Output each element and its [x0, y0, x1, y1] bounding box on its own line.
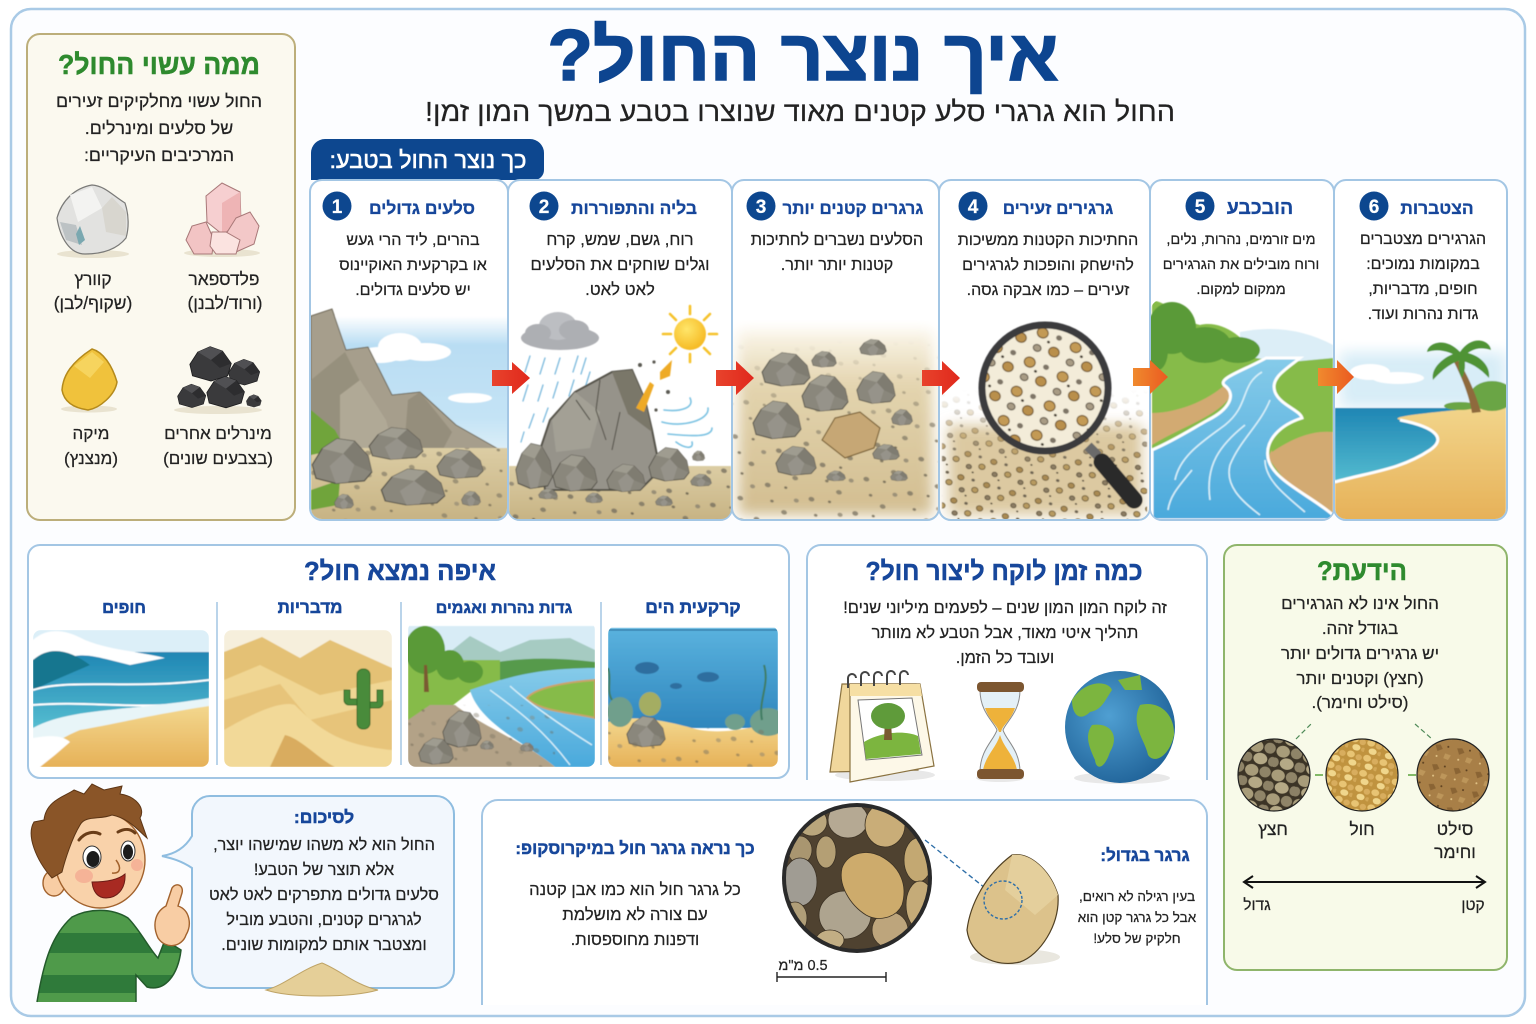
- text 5: ממקום למקום.: [1196, 281, 1286, 298]
- step 5: transport: [1148, 180, 1334, 520]
- illustration: eroding rock with rain, sun and wind: [509, 306, 731, 520]
- text: did you know: (חצץ) וקטנים יותר: [1296, 669, 1424, 688]
- heading 6: הצטברות: [1400, 198, 1474, 218]
- sample: silt and clay: וחימר: [1434, 842, 1476, 862]
- text 6: גדות נהרות ועוד.: [1368, 306, 1479, 323]
- text 1: בהרים, ליד הרי געש: [346, 231, 480, 249]
- text 3: הסלעים נשברים לחתיכות: [751, 231, 923, 249]
- illustration: river: [1148, 300, 1333, 520]
- label: quartz: [54, 269, 132, 313]
- number 3: [746, 192, 776, 220]
- number 5: 5: [1195, 197, 1206, 218]
- label: other minerals: מינרלים אחרים: [164, 424, 272, 443]
- text 4: [958, 232, 1138, 299]
- scale bar 0.5 mm: [777, 958, 886, 982]
- heading: where is sand found: איפה נמצא חול?: [304, 556, 496, 586]
- sample: sand: חול: [1349, 819, 1375, 839]
- heading 2: בליה והתפוררות: [571, 198, 697, 218]
- text 3: קטנות יותר יותר.: [781, 256, 893, 274]
- text: big grain: [1078, 889, 1197, 946]
- text: big grain: בעין רגילה לא רואים,: [1079, 889, 1195, 904]
- text 4: להישחק והופכות לגרגירים: [962, 256, 1134, 274]
- text 3: [751, 231, 923, 274]
- text 4: זעירים – כמו אבקה גסה.: [967, 282, 1129, 299]
- step 6: accumulation: [1334, 180, 1514, 520]
- text 2: [530, 230, 710, 299]
- illustration: beach with palm: [1335, 340, 1514, 520]
- text: big grain: אבל כל גרגר קטן הוא: [1078, 910, 1197, 925]
- sample: silt and clay: סילט: [1437, 819, 1473, 839]
- illustration: magnifying glass over grains: [942, 325, 1147, 520]
- speech bubble: summary: [162, 796, 454, 996]
- text 5: [1163, 231, 1319, 298]
- arrow 1: [492, 362, 530, 394]
- title: איך נוצר החול?: [548, 16, 1058, 96]
- text: microscope: עם צורה לא מושלמת: [562, 905, 708, 924]
- number 4: [958, 192, 988, 220]
- text 5: ורוח מובילים את הגרגירים: [1163, 256, 1319, 273]
- enlarged grain: [967, 855, 1060, 965]
- big rock: [540, 370, 660, 490]
- arrow 3: [922, 361, 960, 395]
- intro text: החול עשוי מחלקיקים זעירים: [56, 91, 262, 111]
- icon: earth globe: [1065, 671, 1175, 784]
- rain: [521, 356, 590, 442]
- sun: [663, 306, 717, 362]
- face: [55, 812, 145, 908]
- label: small: קטן: [1461, 897, 1485, 914]
- mineral: mica: [61, 349, 118, 468]
- sweater: [38, 911, 180, 1002]
- panel: sand grain under microscope: [482, 800, 1207, 1005]
- label: quartz: קוורץ: [74, 269, 112, 289]
- text 1: או בקרקעית האוקיינוס: [339, 256, 487, 274]
- text: summary: ומצטבר אותם למקומות שונים.: [221, 936, 427, 954]
- text 1: [339, 231, 487, 299]
- panel: did you know: [1224, 545, 1507, 970]
- cloud: [521, 312, 599, 350]
- heading: microscope: כך נראה גרגר חול במיקרוסקופ:: [515, 839, 755, 858]
- icon: hourglass: [976, 682, 1024, 782]
- text: summary: סלעים גדולים מתפרקים לאט לאט: [209, 886, 439, 904]
- text: time: ועובד כל הזמן.: [956, 649, 1054, 667]
- text 4: החתיכות הקטנות ממשיכות: [958, 232, 1138, 249]
- magnifier handle: [1088, 446, 1098, 456]
- label: large: גדול: [1243, 897, 1271, 914]
- label: mica: (מנצנץ): [64, 449, 118, 468]
- label: mica: [64, 424, 118, 468]
- step 2: weathering: [508, 180, 732, 520]
- arrow 5: [1318, 360, 1354, 394]
- location: deserts: [224, 598, 392, 767]
- number 2: [530, 192, 558, 220]
- heading: did you know: הידעת?: [1317, 556, 1407, 586]
- text: did you know: (סילט וחימר).: [1312, 693, 1408, 712]
- illustration: broken rocks: [733, 330, 938, 520]
- text: microscope: כל גרגר חול הוא כמו אבן קטנה: [529, 880, 741, 899]
- mineral: feldspar: [184, 183, 262, 313]
- illustration: mountains and boulders: [311, 309, 508, 520]
- location: river and lake banks: גדות נהרות ואגמים: [436, 600, 573, 617]
- sample: gravel: [1238, 739, 1310, 839]
- number 6: [1360, 192, 1388, 220]
- text 6: חופים, מדבריות,: [1368, 281, 1478, 298]
- number 5: [1186, 192, 1214, 220]
- text: big grain: חלקיק של סלע!: [1093, 931, 1181, 946]
- dashed pointers: [1296, 724, 1432, 739]
- sample: silt and clay: [1417, 739, 1489, 862]
- heading: summary: לסיכום:: [294, 807, 354, 827]
- hand and finger: [155, 885, 189, 946]
- text: summary: החול הוא לא משהו שמישהו יוצר,: [213, 836, 435, 854]
- step 1: big rocks: [310, 180, 508, 520]
- small green arrows: [1315, 774, 1416, 776]
- text: summary: [209, 836, 439, 954]
- character: boy pointing: [30, 784, 190, 1005]
- text: did you know: החול אינו לא הגרגירים: [1281, 594, 1439, 613]
- mineral: other dark minerals: [163, 347, 273, 468]
- dashed zoom line: [925, 840, 985, 888]
- panel: what sand is made of: [27, 34, 295, 520]
- text: microscope: [529, 880, 741, 949]
- text 2: רוח, גשם, שמש, קרח: [546, 230, 694, 249]
- intro text: של סלעים ומינרלים.: [85, 118, 233, 138]
- location: beaches: [33, 599, 209, 767]
- heading 3: גרגרים קטנים יותר: [783, 199, 923, 218]
- label: other minerals: [163, 424, 273, 468]
- text: summary: אלא תוצר של הטבע!: [254, 861, 395, 879]
- text 6: [1360, 231, 1486, 323]
- location: beaches: חופים: [102, 599, 146, 617]
- text: did you know: [1281, 594, 1439, 712]
- location: sea floor: [607, 597, 786, 767]
- text: summary: לגרגרים קטנים, והטבע מוביל: [226, 911, 422, 929]
- text: time: [843, 599, 1167, 667]
- mouth: [92, 874, 125, 898]
- arrow 4: [1133, 360, 1168, 394]
- text 6: הגרגירים מצטברים: [1360, 231, 1486, 248]
- size scale arrow: [1244, 876, 1485, 888]
- text 5: מים זורמים, נהרות, נלים,: [1166, 231, 1316, 248]
- number 1: 1: [332, 197, 343, 218]
- tab: how sand forms in nature: [311, 139, 544, 190]
- text: did you know: יש גרגירים גדולים יותר: [1281, 644, 1439, 663]
- microscope view of grains: [782, 802, 934, 953]
- label: other minerals: (בצבעים שונים): [163, 449, 273, 468]
- text: time: זה לוקח המון המון שנים – לפעמים מיליוני שנים!: [843, 599, 1167, 617]
- wind: [662, 398, 712, 447]
- dividers: [217, 602, 601, 765]
- number 6: 6: [1369, 197, 1379, 218]
- cactus: [344, 669, 383, 729]
- heading: big grain: גרגר בגדול:: [1100, 846, 1190, 865]
- intro text: [56, 91, 262, 165]
- heading 4: גרגירים זעירים: [1003, 199, 1113, 218]
- number 1: [322, 192, 352, 220]
- icon: calendar: [830, 671, 935, 782]
- heading 5: הובכבע: [1227, 197, 1293, 219]
- text: time: תהליך איטי מאוד, אבל הטבע לא מוותר: [872, 624, 1138, 642]
- label: feldspar: פלדספאר: [188, 269, 260, 289]
- step 4: tiny grains: [939, 180, 1150, 520]
- location: deserts: מדבריות: [278, 598, 342, 617]
- subtitle: החול הוא גרגרי סלע קטנים מאוד שנוצרו בטבע במשך המון זמן!: [425, 96, 1175, 127]
- orange flying chips: [636, 360, 672, 412]
- text 1: יש סלעים גדולים.: [355, 281, 471, 299]
- hair: [31, 784, 147, 878]
- nose: [112, 860, 119, 873]
- mineral: quartz: [54, 185, 132, 313]
- icon: sand pile: [266, 963, 378, 996]
- text 2: לאט לאט.: [585, 280, 655, 299]
- panel: where sand is found: [28, 545, 789, 778]
- ear: [43, 870, 65, 896]
- step 3: smaller pieces: [732, 180, 939, 520]
- label: mica: מיקה: [73, 424, 109, 443]
- tab: how sand forms in nature: כך נוצר החול בטבע:: [330, 147, 526, 173]
- heading: what is sand made of: ממה עשוי החול?: [58, 49, 260, 80]
- number 2: 2: [539, 197, 549, 218]
- text 2: וגלים שוחקים את הסלעים: [530, 255, 710, 274]
- location: sea floor: קרקעית הים: [645, 597, 741, 617]
- label: feldspar: (ורוד/לבנן): [188, 293, 262, 313]
- label: quartz: (שקוף/לבן): [54, 293, 132, 313]
- heading: how long: כמה זמן לוקח ליצור חול?: [866, 556, 1142, 586]
- sample: gravel: חצץ: [1258, 819, 1288, 839]
- heading 1: סלעים גדולים: [369, 198, 475, 218]
- text: did you know: בגודל זהה.: [1322, 619, 1398, 638]
- eyebrows: [79, 829, 135, 840]
- panel: how long it takes: [807, 545, 1207, 784]
- arrow 2: [716, 361, 754, 395]
- number 3: 3: [756, 197, 766, 218]
- intro text: המרכיבים העיקריים:: [84, 145, 234, 165]
- cheeks: [75, 859, 143, 883]
- text: microscope: ודפנות מחוספסות.: [571, 930, 699, 949]
- location: river and lake banks: [405, 600, 595, 767]
- text 6: במקומות נמוכים:: [1366, 256, 1480, 273]
- magnifier lens: [982, 325, 1108, 451]
- label: feldspar: [188, 269, 262, 313]
- sample: sand: [1326, 739, 1398, 839]
- number 4: 4: [968, 197, 979, 218]
- eyes: [83, 841, 135, 868]
- scale bar 0.5 mm: 0.5 מ"מ: [778, 958, 828, 974]
